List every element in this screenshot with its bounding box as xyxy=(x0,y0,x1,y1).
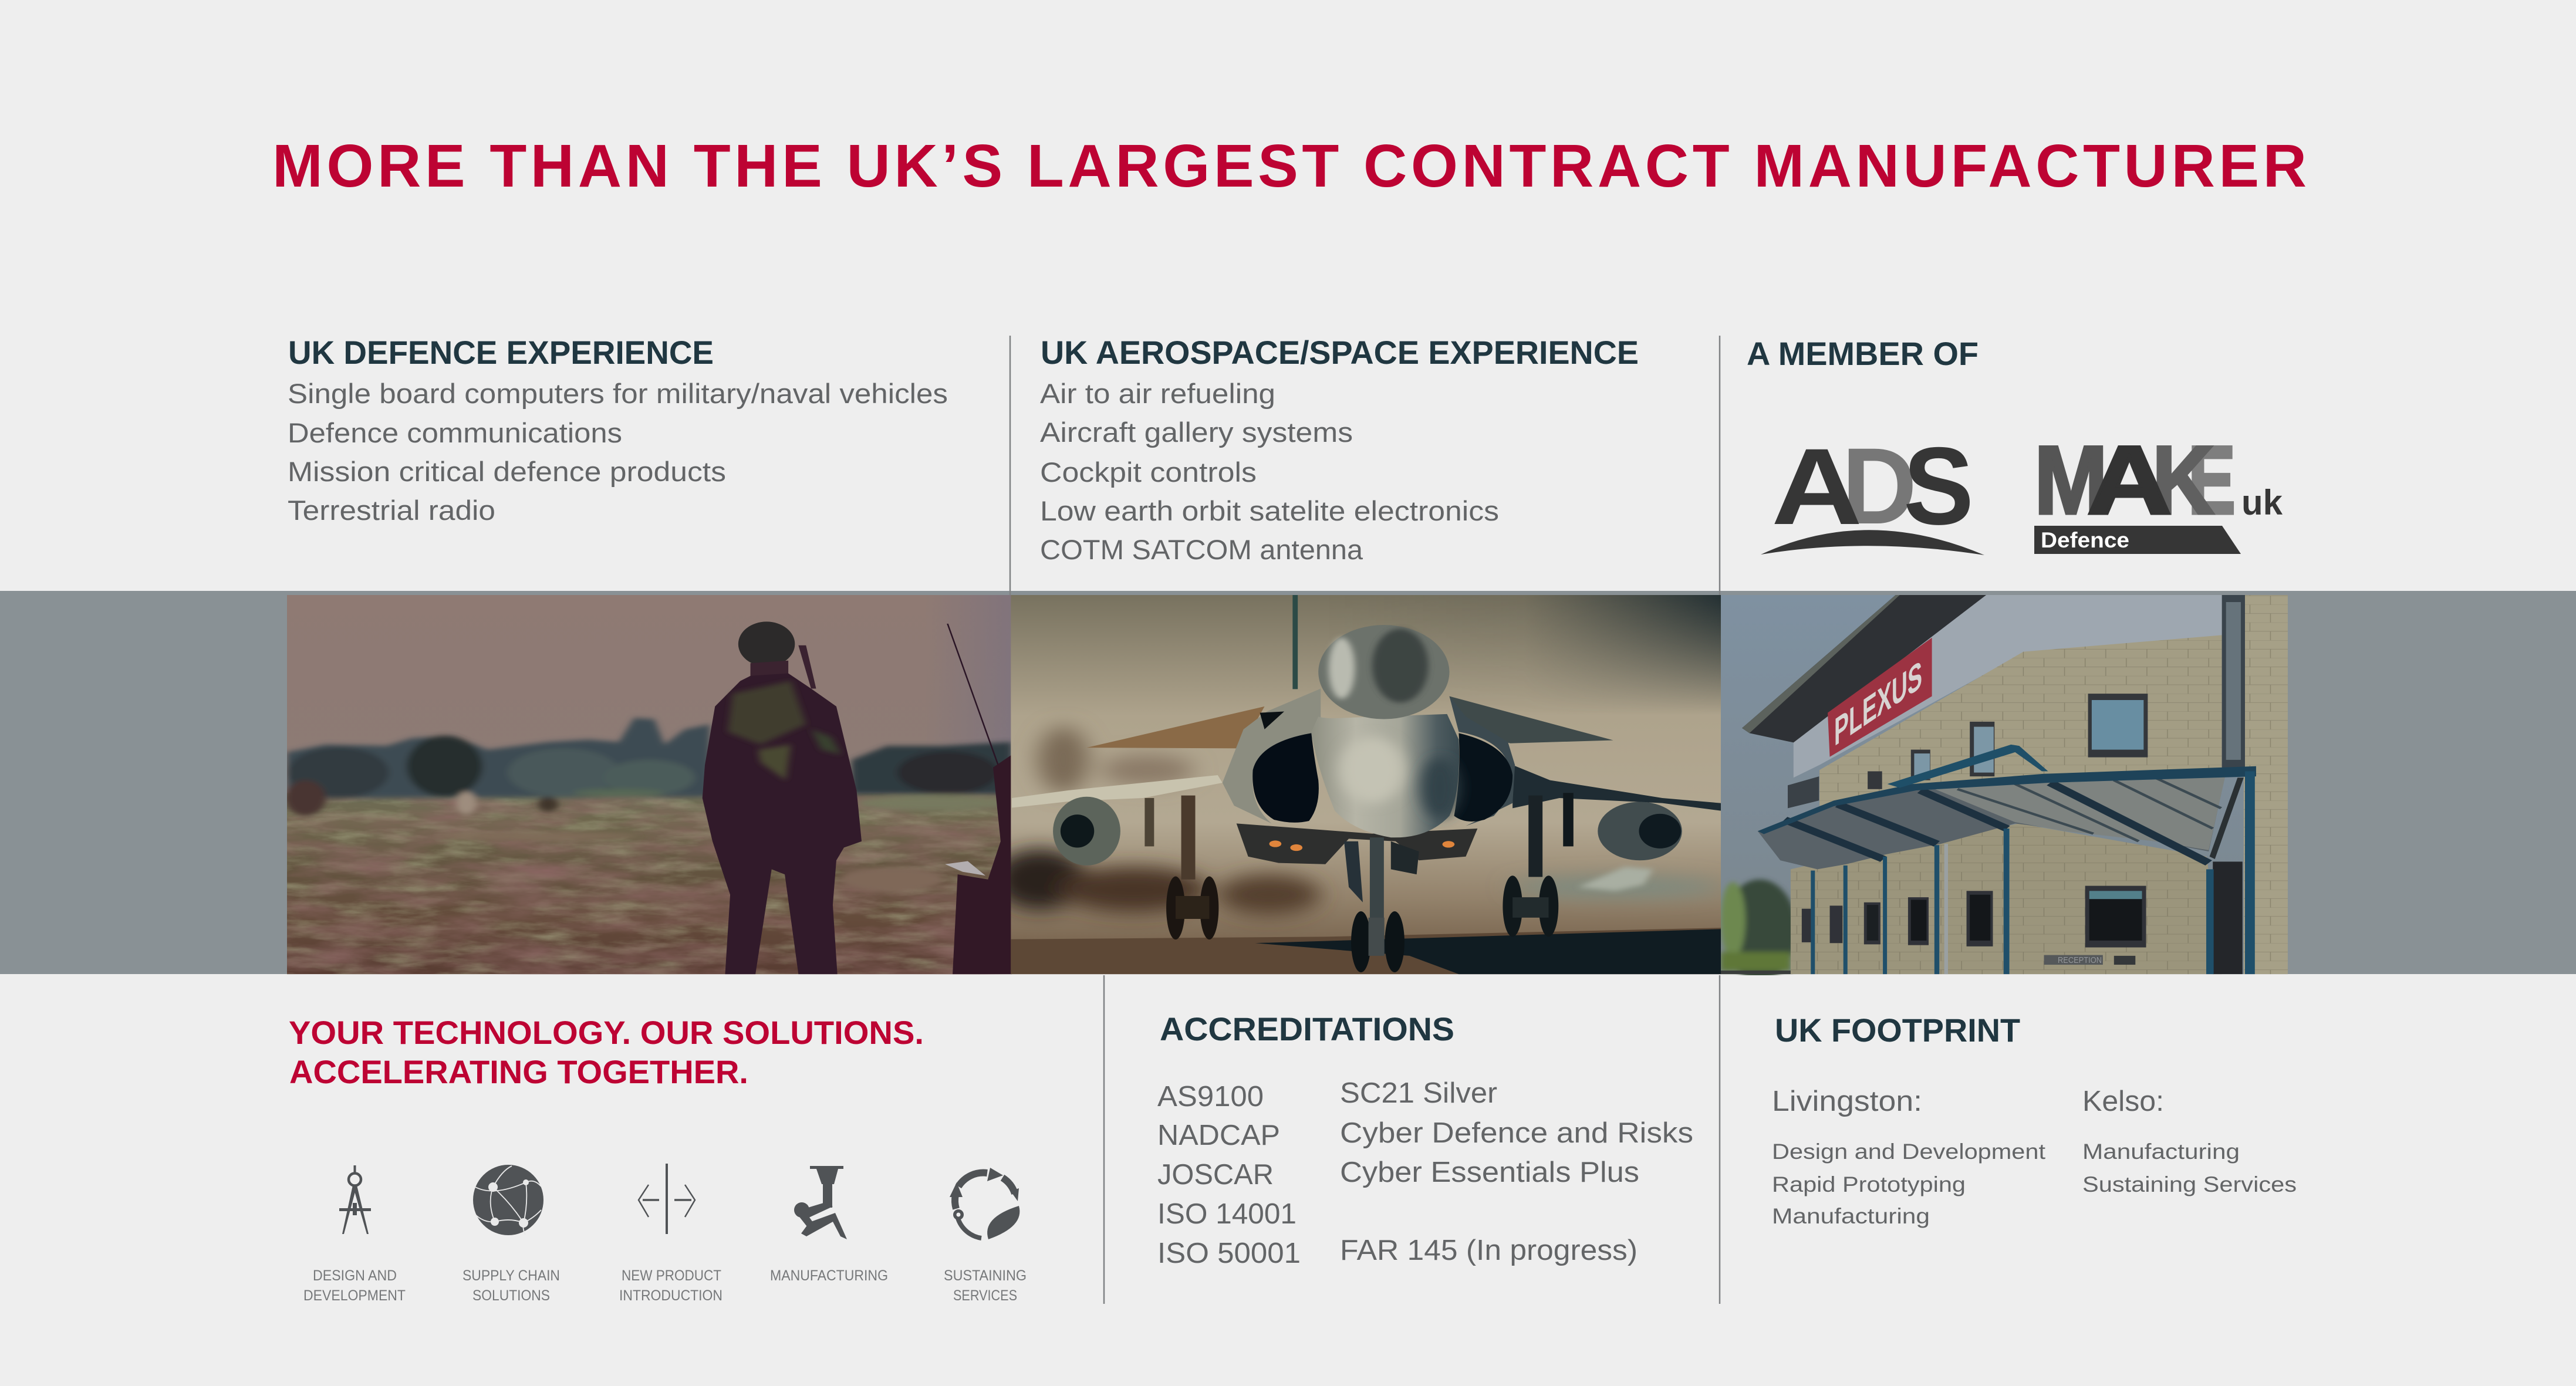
grey band behind photos xyxy=(0,591,2576,974)
logo: Make UK Defence: uk xyxy=(2241,483,2283,522)
list: defence experience items: Single board computers for military/naval vehicles xyxy=(288,378,948,409)
panel: UK aerospace and space experience xyxy=(1040,334,1639,565)
list: defence experience items xyxy=(288,378,948,526)
site: Livingston: Livingston: xyxy=(1772,1086,1922,1117)
panel: UK defence experience xyxy=(288,334,948,526)
label: sustaining services xyxy=(944,1267,1027,1304)
label: new product introduction: INTRODUCTION xyxy=(619,1287,723,1304)
list: security and aviation accreditations: Cyber Defence and Risks xyxy=(1340,1117,1693,1149)
photo: Plexus building: RECEPTION xyxy=(2058,955,2102,965)
list: defence experience items: Mission critical defence products xyxy=(288,456,726,487)
icon: new product introduction xyxy=(639,1164,695,1234)
heading: your technology tagline: ACCELERATING TOGETHER. xyxy=(289,1053,748,1090)
label: supply chain solutions: SUPPLY CHAIN xyxy=(462,1267,560,1284)
logo: Make UK Defence: E xyxy=(2188,426,2236,534)
site: Livingston xyxy=(1772,1086,2046,1228)
panel: accreditations xyxy=(1157,1010,1693,1269)
list: quality accreditations xyxy=(1157,1081,1301,1269)
label: design and development: DESIGN AND xyxy=(313,1267,397,1284)
logo: Make UK Defence: M xyxy=(2034,426,2108,534)
heading: UK defence experience: UK DEFENCE EXPERIENCE xyxy=(288,334,714,371)
heading: your technology tagline: YOUR TECHNOLOGY. OUR SOLUTIONS. xyxy=(289,1014,924,1051)
list: defence experience items: Terrestrial radio xyxy=(288,495,495,526)
site: Livingston: Design and Development xyxy=(1772,1140,2046,1164)
logo: Make UK Defence: Defence xyxy=(2041,528,2129,552)
logo: Make UK Defence: A xyxy=(2087,426,2172,534)
heading: UK aerospace/space experience: UK AEROSPACE/SPACE EXPERIENCE xyxy=(1041,334,1639,371)
list: quality accreditations: NADCAP xyxy=(1157,1120,1280,1151)
list: aerospace experience items: COTM SATCOM antenna xyxy=(1040,534,1363,565)
label: sustaining services: SERVICES xyxy=(953,1287,1017,1304)
label: supply chain solutions xyxy=(462,1267,560,1304)
panel: UK footprint xyxy=(1772,1012,2297,1228)
label: supply chain solutions: SOLUTIONS xyxy=(472,1287,550,1304)
label: new product introduction: NEW PRODUCT xyxy=(622,1267,721,1284)
site: Livingston: Rapid Prototyping xyxy=(1772,1172,1966,1196)
photo: Plexus building: PLEXUS xyxy=(1834,652,1922,755)
list: aerospace experience items: Air to air refueling xyxy=(1040,378,1275,409)
heading: your technology tagline xyxy=(289,1014,924,1090)
label: design and development xyxy=(303,1267,406,1304)
panel: your technology, our solutions xyxy=(289,1014,1027,1304)
photo: fighter jet on a runway xyxy=(993,595,1723,974)
label: new product introduction xyxy=(619,1267,723,1304)
label: sustaining services: SUSTAINING xyxy=(944,1267,1027,1284)
list: defence experience items: Defence communications xyxy=(288,417,622,448)
site: Livingston: Manufacturing xyxy=(1772,1204,1930,1228)
icon: compass, design and development xyxy=(339,1165,371,1234)
site: Kelso xyxy=(2082,1086,2297,1196)
logo: ADS: S xyxy=(1903,424,1974,547)
panel: member of xyxy=(1747,335,2283,555)
photo: Plexus building xyxy=(1721,595,2289,981)
site: Kelso: Kelso: xyxy=(2082,1086,2164,1117)
title: MORE THAN THE UK’S LARGEST CONTRACT MANUFACTURER xyxy=(272,132,2307,200)
list: quality accreditations: JOSCAR xyxy=(1157,1159,1274,1191)
label: manufacturing: MANUFACTURING xyxy=(770,1267,888,1284)
logo: Make UK Defence: K xyxy=(2152,426,2214,534)
list: quality accreditations: ISO 14001 xyxy=(1157,1198,1297,1230)
site: Kelso: Manufacturing xyxy=(2082,1140,2240,1164)
list: security and aviation accreditations xyxy=(1340,1077,1693,1266)
list: security and aviation accreditations: Cyber Essentials Plus xyxy=(1340,1157,1639,1188)
icon: recycling leaf, sustaining services xyxy=(950,1168,1019,1239)
heading: accreditations: ACCREDITATIONS xyxy=(1160,1010,1454,1047)
logo: ADS: D xyxy=(1842,426,1917,547)
label: design and development: DEVELOPMENT xyxy=(303,1287,406,1304)
list: security and aviation accreditations: SC21 Silver xyxy=(1340,1077,1497,1109)
photo: soldier in a field xyxy=(285,595,1012,974)
heading: UK footprint: UK FOOTPRINT xyxy=(1775,1012,2020,1049)
logo: ADS: A xyxy=(1771,427,1862,547)
list: aerospace experience items: Cockpit controls xyxy=(1040,457,1257,488)
list: aerospace experience items: Aircraft gallery systems xyxy=(1040,417,1353,448)
list: quality accreditations: AS9100 xyxy=(1157,1081,1264,1113)
heading: a member of: A MEMBER OF xyxy=(1747,335,1979,372)
list: aerospace experience items: Low earth orbit satelite electronics xyxy=(1040,495,1499,526)
icon: robot arm, manufacturing xyxy=(794,1166,847,1239)
site: Kelso: Sustaining Services xyxy=(2082,1172,2297,1196)
list: quality accreditations: ISO 50001 xyxy=(1157,1238,1301,1269)
logo: Make UK Defence xyxy=(2034,426,2283,554)
icon: network globe, supply chain solutions xyxy=(473,1165,543,1235)
logo: ADS xyxy=(1761,424,1984,555)
list: aerospace experience items xyxy=(1040,378,1499,565)
list: security and aviation accreditations: FAR 145 (In progress) xyxy=(1340,1235,1638,1266)
